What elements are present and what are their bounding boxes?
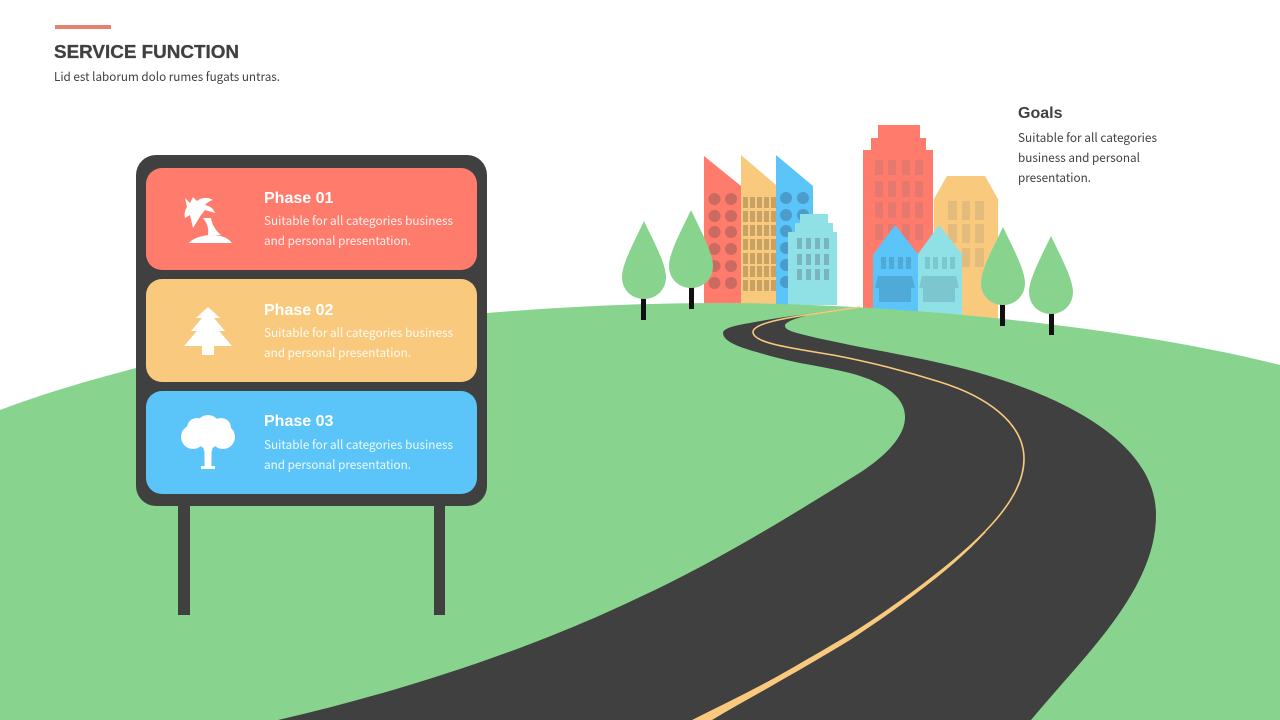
- panel: city skyline: [704, 125, 998, 320]
- signboard: [136, 155, 487, 615]
- building: aqua tower: [788, 214, 837, 305]
- phase 03 description: Suitable for all categories business: [264, 436, 453, 453]
- hill: [0, 303, 1280, 720]
- building: yellow tower: [934, 176, 998, 320]
- panel: phase 02: [146, 279, 477, 382]
- phase 02 description: [264, 324, 453, 361]
- building: blue house: [873, 225, 918, 315]
- phase 01 description: Suitable for all categories business: [264, 212, 453, 229]
- panel: phase 01: [146, 168, 477, 270]
- building: blue slanted: [776, 155, 813, 305]
- accent bar: [55, 25, 111, 29]
- icon: round tree: [181, 415, 235, 469]
- phase 01 heading: Phase 01: [264, 190, 333, 207]
- tree: [981, 227, 1025, 326]
- phase 01 description: [264, 212, 453, 249]
- building: aqua house: [918, 225, 962, 318]
- road centre line: [692, 307, 1024, 720]
- icon: pine tree: [184, 307, 232, 355]
- phase 02 description: Suitable for all categories business: [264, 324, 453, 341]
- tree: [622, 221, 666, 320]
- building: yellow slanted: [741, 155, 776, 305]
- subtitle: Lid est laborum dolo rumes fugats untras.: [54, 68, 280, 85]
- phase 02 description: and personal presentation.: [264, 344, 411, 361]
- tree: [1029, 236, 1073, 335]
- road: [278, 307, 1156, 720]
- goals heading: Goals: [1018, 105, 1063, 122]
- phase 01 description: and personal presentation.: [264, 232, 411, 249]
- title: SERVICE FUNCTION: [54, 41, 239, 62]
- phase 02 heading: Phase 02: [264, 302, 333, 319]
- sign frame: [136, 155, 487, 506]
- goals description: business and personal: [1018, 149, 1140, 166]
- goals description: Suitable for all categories: [1018, 129, 1157, 146]
- phase 03 description: and personal presentation.: [264, 456, 411, 473]
- goals description: presentation.: [1018, 169, 1091, 186]
- tree: [669, 210, 713, 309]
- panel: phase 03: [146, 391, 477, 494]
- phase 03 description: [264, 436, 453, 473]
- building: red slanted: [704, 156, 741, 305]
- goals text block: [1018, 105, 1157, 186]
- phase 03 heading: Phase 03: [264, 413, 333, 430]
- building: red tower: [863, 125, 933, 310]
- icon: palm island: [185, 197, 232, 243]
- sign posts: [178, 500, 445, 615]
- goals description: [1018, 129, 1157, 186]
